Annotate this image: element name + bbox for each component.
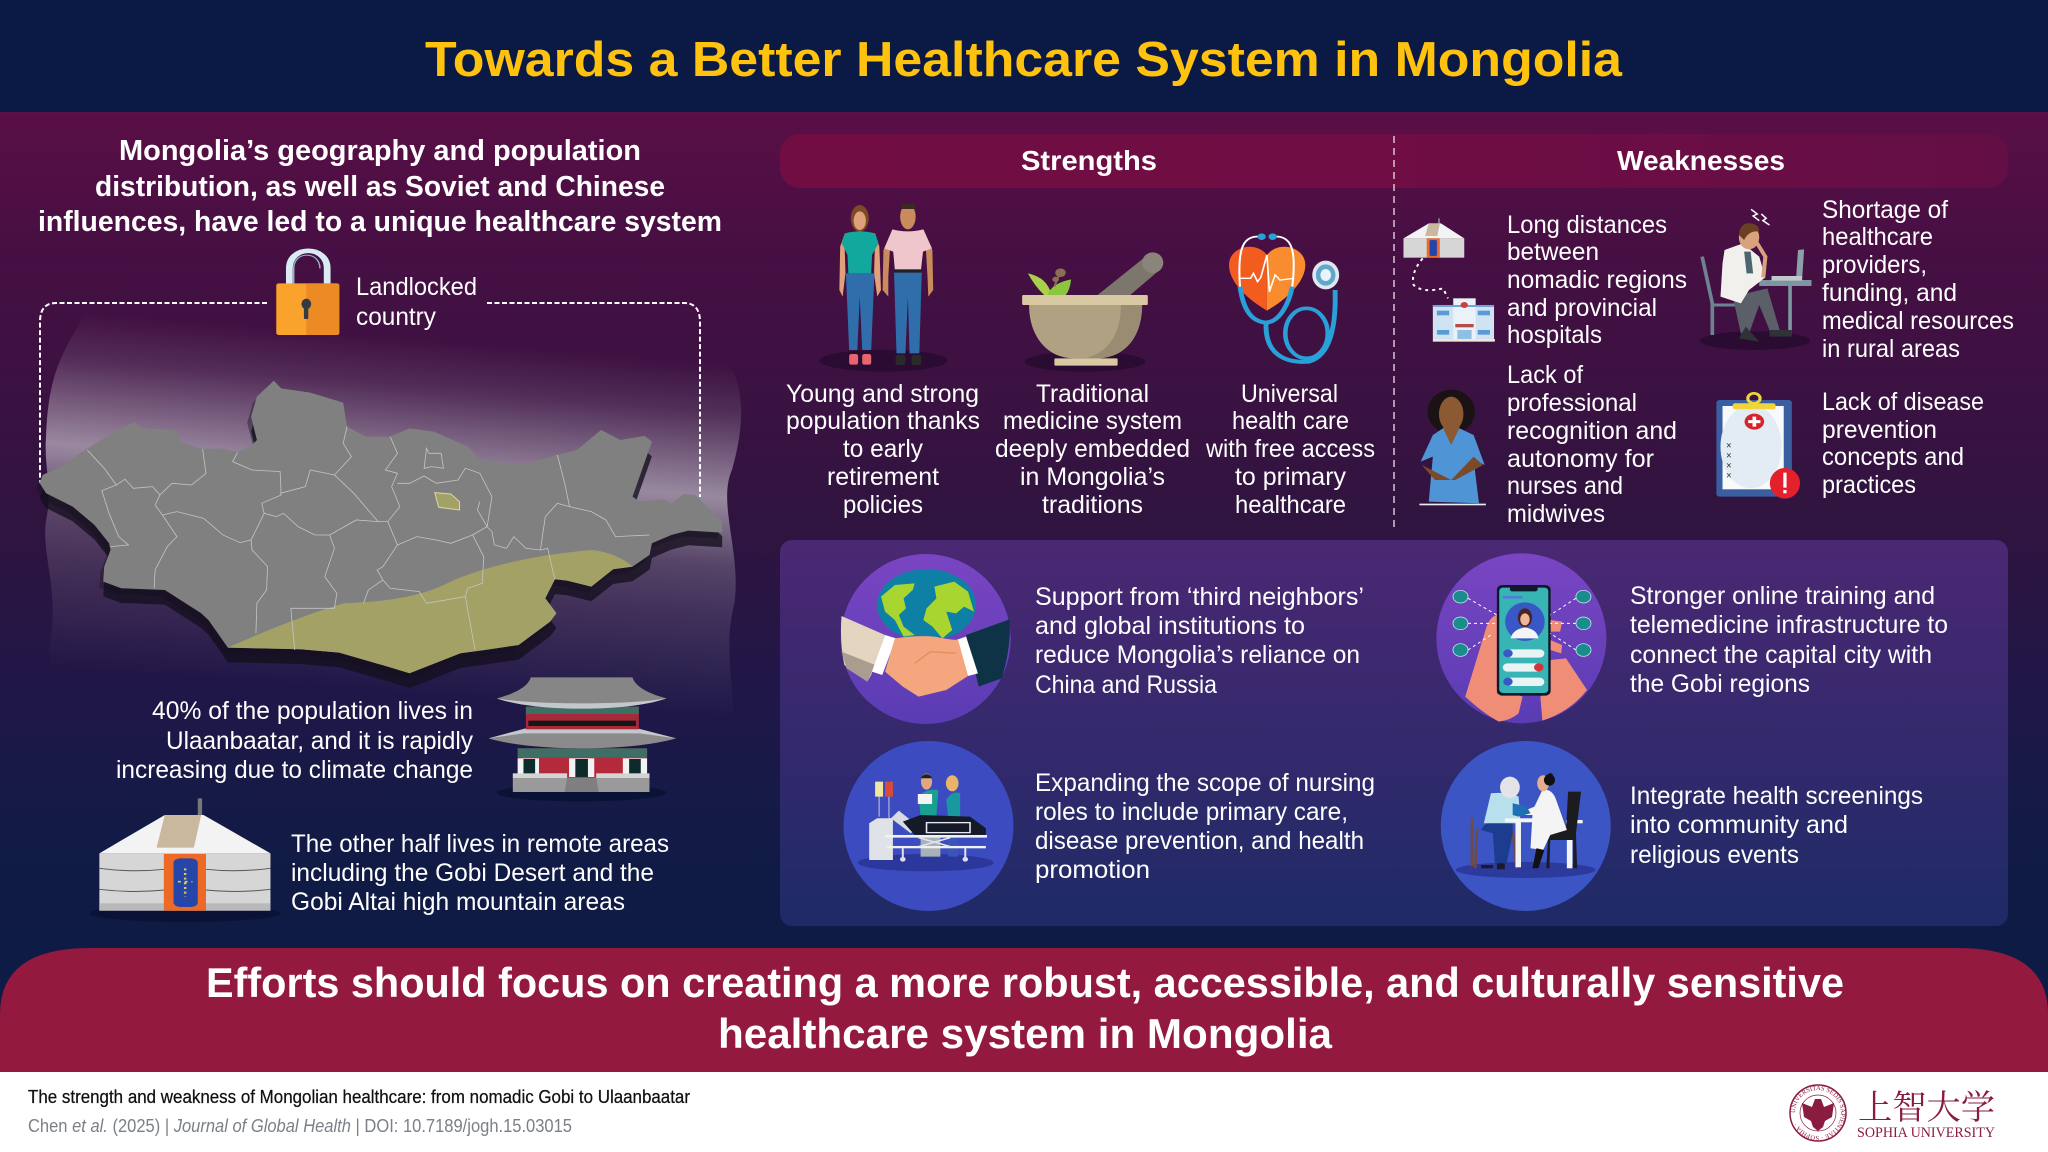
strength 2 text: in Mongolia’s <box>1020 463 1165 491</box>
strengths and weaknesses header bar <box>780 134 2008 188</box>
opportunity 2 text: promotion <box>1035 856 1150 884</box>
opportunity 4 text: religious events <box>1630 841 1799 869</box>
opportunity 4 text: into community and <box>1630 811 1848 839</box>
icon: health screening <box>1441 741 1611 911</box>
opportunity 1 text: reduce Mongolia’s reliance on <box>1035 641 1360 669</box>
icon: pagoda <box>489 677 676 801</box>
conclusion text: healthcare system in Mongolia <box>718 1010 1333 1057</box>
opportunity 2 text: roles to include primary care, <box>1035 798 1348 826</box>
weakness 3 text: nurses and <box>1507 472 1623 500</box>
icon: yurt to hospital distance <box>1403 218 1495 342</box>
logo: university name: 上智大学 <box>1858 1089 1995 1127</box>
weakness 3 text: autonomy for <box>1507 445 1654 473</box>
weakness 1 text: between <box>1507 238 1599 266</box>
opportunity 2 text: disease prevention, and health <box>1035 827 1364 855</box>
panel: strengths <box>786 204 1375 519</box>
Ulaanbaatar text: Ulaanbaatar, and it is rapidly <box>166 727 473 755</box>
left panel: geography <box>36 135 741 922</box>
left heading: Mongolia’s geography and population <box>119 135 641 167</box>
icon: clipboard with alert <box>1716 393 1800 499</box>
weakness 3 text: Lack of <box>1507 361 1583 389</box>
strength 2 text: Traditional <box>1036 380 1149 408</box>
icon: tired doctor at laptop <box>1700 209 1811 350</box>
weakness 4 text: concepts and <box>1822 443 1964 471</box>
icon: nurse <box>1419 390 1486 505</box>
weakness 3 text: recognition and <box>1507 417 1677 445</box>
strength 2 text: deeply embedded <box>995 435 1190 463</box>
weakness 2 text: medical resources <box>1822 307 2014 335</box>
left heading: distribution, as well as Soviet and Chinese <box>95 171 665 203</box>
remote areas text: The other half lives in remote areas <box>291 830 669 858</box>
icon: yurt <box>90 798 281 922</box>
logo: university name: SOPHIA UNIVERSITY <box>1857 1125 1995 1141</box>
Ulaanbaatar text <box>116 697 473 784</box>
landlocked label <box>356 273 477 331</box>
opportunity 1 text: China and Russia <box>1035 671 1217 699</box>
strength 1 text: population thanks <box>786 407 980 435</box>
strengths heading: Strengths <box>1021 145 1157 176</box>
strength 1 text: to early <box>843 435 923 463</box>
strength 1 text: retirement <box>827 463 939 491</box>
weakness 2 text: funding, and <box>1822 279 1957 307</box>
opportunity 3 text: telemedicine infrastructure to <box>1630 611 1948 639</box>
conclusion text <box>206 959 1844 1057</box>
weakness 1 text: nomadic regions <box>1507 266 1687 294</box>
weakness 3 text <box>1507 361 1677 528</box>
icon: hospital bed with nurses <box>843 741 1014 911</box>
icon: padlock <box>276 251 339 335</box>
strength 3 text: Universal <box>1241 380 1338 408</box>
strength 3 text <box>1205 380 1375 519</box>
strength 3 text: to primary <box>1235 463 1346 491</box>
map of Mongolia <box>36 381 722 688</box>
conclusion text: Efforts should focus on creating a more robust, accessible, and culturally sensitive <box>206 959 1844 1006</box>
strength 1 text: Young and strong <box>786 380 979 408</box>
opportunity 1 text: and global institutions to <box>1035 612 1305 640</box>
footer <box>28 1084 1995 1142</box>
weakness 2 text: providers, <box>1822 251 1927 279</box>
icon: telemedicine phone <box>1436 553 1606 723</box>
weakness 1 text: Long distances <box>1507 211 1667 239</box>
icon: mortar and pestle <box>1022 252 1163 372</box>
Ulaanbaatar text: 40% of the population lives in <box>152 697 473 725</box>
province borders <box>87 427 649 650</box>
weakness 3 text: professional <box>1507 389 1637 417</box>
dashed border bracket <box>40 303 700 497</box>
strength 3 text: healthcare <box>1235 491 1346 519</box>
opportunity 4 text: Integrate health screenings <box>1630 782 1923 810</box>
weakness 3 text: midwives <box>1507 500 1605 528</box>
conclusion banner <box>0 948 2048 1072</box>
left heading <box>38 135 722 238</box>
Ulaanbaatar highlight <box>435 493 459 510</box>
weakness 4 text: Lack of disease <box>1822 388 1984 416</box>
weakness 2 text: Shortage of <box>1822 196 1948 224</box>
Ulaanbaatar text: increasing due to climate change <box>116 756 473 784</box>
weakness 1 text <box>1507 211 1687 349</box>
weakness 2 text: in rural areas <box>1822 335 1960 363</box>
weakness 1 text: hospitals <box>1507 321 1602 349</box>
weakness 4 text <box>1822 388 1984 499</box>
strength 1 text <box>786 380 980 519</box>
opportunity 3 text: the Gobi regions <box>1630 670 1810 698</box>
remote areas text: including the Gobi Desert and the <box>291 859 654 887</box>
opportunity 3 text: Stronger online training and <box>1630 582 1935 610</box>
panel: opportunities <box>780 540 2008 926</box>
citation details: Chen et al. (2025) | Journal of Global Health | DOI: 10.7189/jogh.15.03015 <box>28 1116 572 1136</box>
strength 2 text: medicine system <box>1003 407 1182 435</box>
opportunity 4 text <box>1630 782 1923 869</box>
title: Towards a Better Healthcare System in Mongolia <box>425 33 1623 87</box>
weakness 2 text: healthcare <box>1822 223 1933 251</box>
opportunity 2 text <box>1035 769 1375 884</box>
Gobi region highlight <box>228 550 633 673</box>
icon: young couple <box>819 204 947 372</box>
map glow backdrop <box>45 310 741 740</box>
weakness 1 text: and provincial <box>1507 294 1657 322</box>
opportunity 3 text <box>1630 582 1948 698</box>
citation title: The strength and weakness of Mongolian healthcare: from nomadic Gobi to Ulaanbaatar <box>28 1087 690 1107</box>
header band <box>0 0 2048 112</box>
weakness 4 text: practices <box>1822 471 1916 499</box>
strength 2 text: traditions <box>1042 491 1143 519</box>
strength 3 text: with free access <box>1205 435 1375 463</box>
logo: university seal: UNIVERSITAS SEDIS SAPIENTIAE · SOPHIA · <box>1790 1086 1846 1140</box>
remote areas text: Gobi Altai high mountain areas <box>291 888 625 916</box>
opportunity 3 text: connect the capital city with <box>1630 641 1932 669</box>
landlocked label: country <box>356 303 436 331</box>
opportunity 2 text: Expanding the scope of nursing <box>1035 769 1375 797</box>
landlocked label: Landlocked <box>356 273 477 301</box>
weakness 2 text <box>1822 196 2014 363</box>
strength 3 text: health care <box>1232 407 1349 435</box>
opportunity 1 text: Support from ‘third neighbors’ <box>1035 583 1364 611</box>
left heading: influences, have led to a unique healthcare system <box>38 206 722 238</box>
strength 2 text <box>995 380 1190 519</box>
strength 1 text: policies <box>843 491 923 519</box>
remote areas text <box>291 830 669 916</box>
panel: weaknesses <box>1403 196 2014 528</box>
weakness 4 text: prevention <box>1822 416 1937 444</box>
opportunity 1 text <box>1035 583 1364 699</box>
icon: heart and stethoscope <box>1229 233 1339 362</box>
icon: globe and handshake <box>841 554 1011 724</box>
weaknesses heading: Weaknesses <box>1617 145 1785 176</box>
